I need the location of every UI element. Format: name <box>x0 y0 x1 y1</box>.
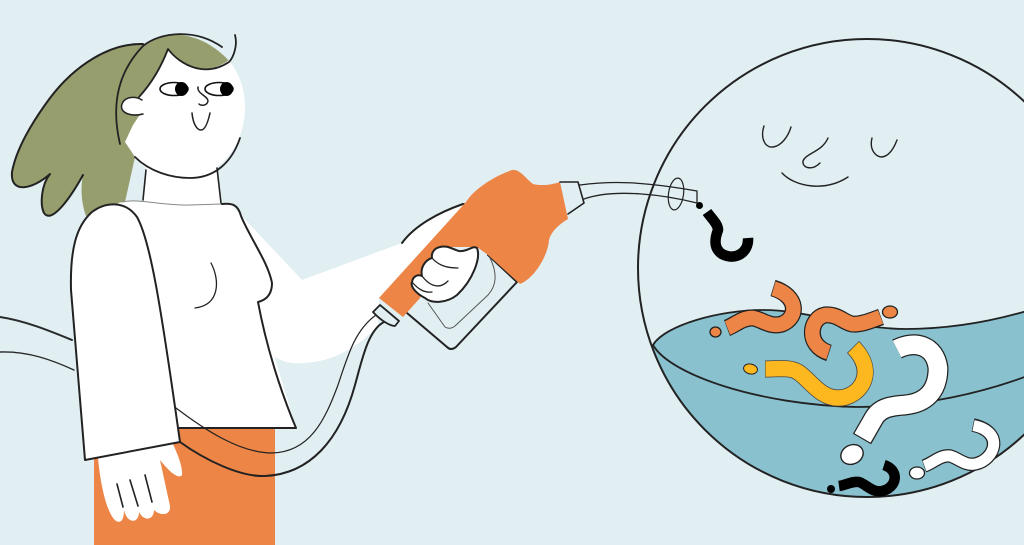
handle guard <box>407 255 517 349</box>
lower hose <box>176 315 384 476</box>
black question mark in bowl <box>827 465 895 493</box>
right eye <box>205 82 233 96</box>
nozzle small end <box>373 305 399 326</box>
hair cap <box>115 35 232 144</box>
bowl of water <box>640 310 1024 510</box>
neck <box>143 165 222 205</box>
nose <box>198 87 208 105</box>
orange question mark 2 <box>812 306 898 353</box>
gripping hand <box>412 246 478 302</box>
ponytail outline <box>12 44 143 216</box>
falling black question mark <box>707 212 748 257</box>
arm <box>238 212 431 363</box>
skirt <box>94 428 275 545</box>
torso <box>118 201 296 428</box>
chest line <box>195 263 216 308</box>
fuel tube <box>560 177 703 214</box>
sleeve <box>71 204 180 460</box>
head <box>115 34 245 178</box>
sleeping face <box>763 126 897 186</box>
hand on hip <box>98 438 182 522</box>
small white question mark <box>910 425 994 479</box>
face <box>125 49 245 178</box>
ear <box>122 97 143 115</box>
big white question mark <box>838 345 938 468</box>
mouth <box>192 113 210 130</box>
left eye <box>160 82 188 96</box>
fuel nozzle <box>379 170 568 317</box>
yellow question mark <box>743 347 865 398</box>
ponytail hair <box>12 44 150 216</box>
upper hand <box>402 204 466 243</box>
left hose <box>0 317 74 370</box>
big circle <box>638 39 1024 497</box>
orange question mark 1 <box>710 288 793 337</box>
